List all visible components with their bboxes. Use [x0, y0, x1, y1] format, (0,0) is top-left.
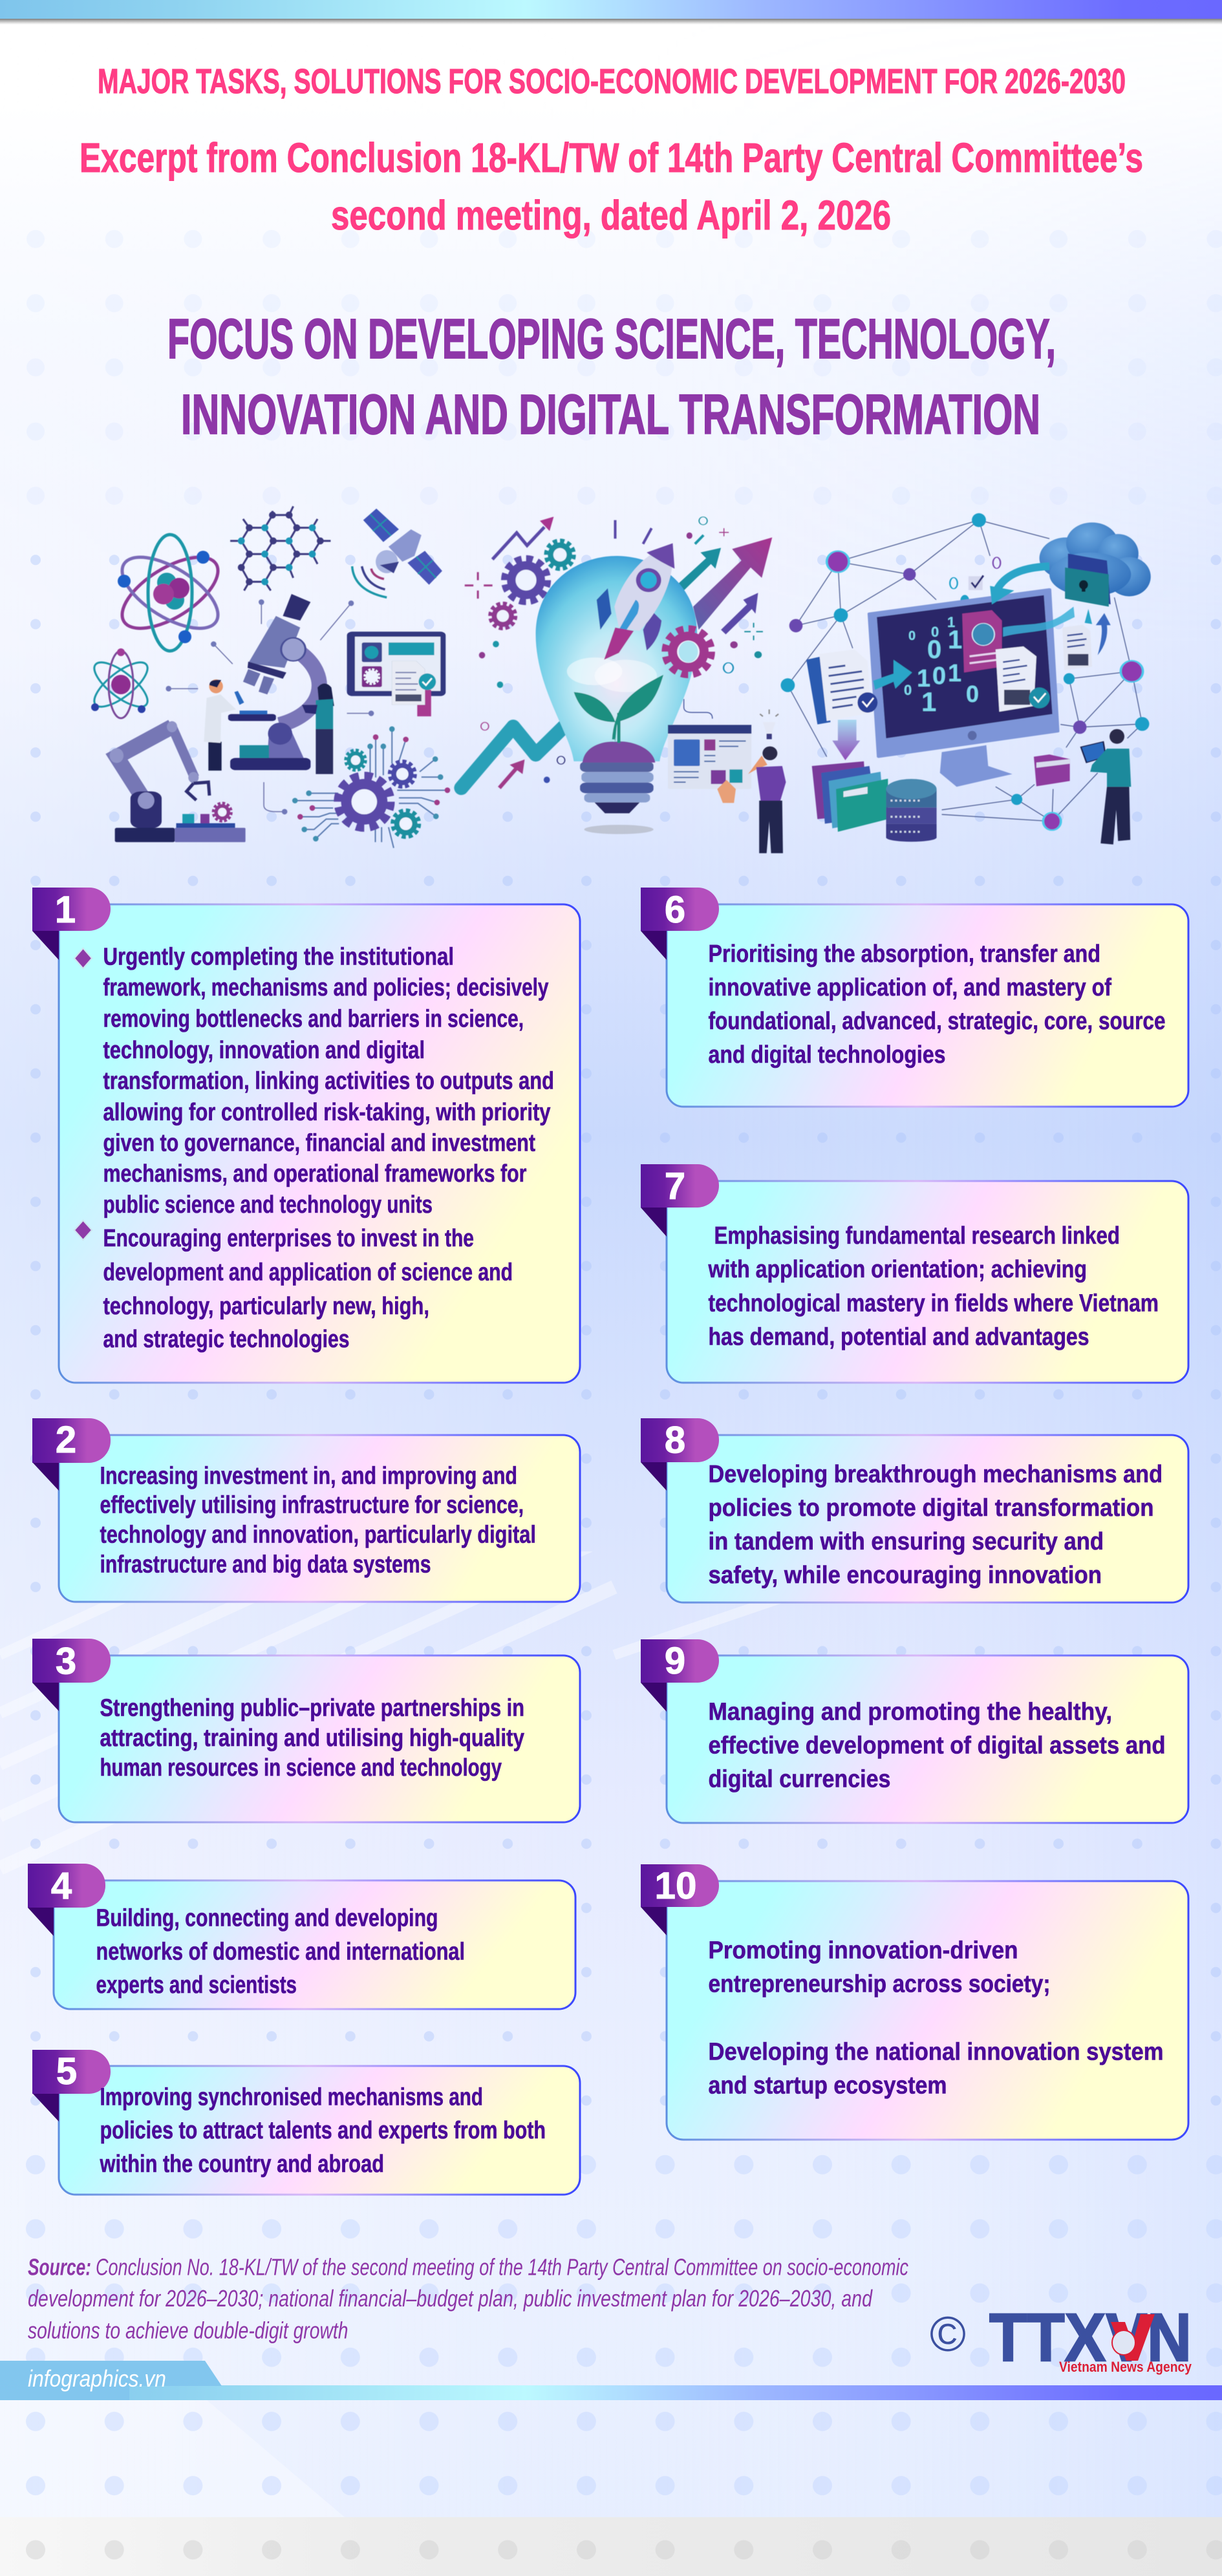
panel: task 1: Urgently completing the institutional: [103, 944, 454, 971]
icon: tablet with certificate: [347, 632, 445, 716]
diagram: network nodes: [780, 513, 1149, 830]
monitor binary text: 0: [904, 682, 912, 698]
panel: task 5: within the country and abroad: [100, 2151, 384, 2178]
panel: task 1: Encouraging enterprises to invest in the: [103, 1225, 474, 1252]
panel: task 9: effective development of digital assets and: [709, 1732, 1165, 1760]
panel: task 10: entrepreneurship across society;: [709, 1970, 1050, 1997]
right cluster drawn in local coordinates: [668, 513, 1151, 853]
monitor binary text: [904, 614, 979, 717]
subtitle: second meeting, dated April 2, 2026: [331, 192, 891, 239]
logo: TTXVN Vietnam News Agency: ©: [930, 2307, 966, 2362]
panel: task 6: Prioritising the absorption, transfer and: [709, 941, 1100, 968]
panel: task 1: removing bottlenecks and barriers in science,: [103, 1006, 524, 1033]
main heading: [167, 308, 1056, 446]
panel: task 4: Building, connecting and developing: [96, 1904, 438, 1932]
icon: folder: [1034, 754, 1070, 786]
icon: growth arrows and gears: [461, 516, 772, 788]
icon: computer monitor: [870, 590, 1058, 787]
panel: task 6: 6: [665, 889, 685, 931]
panel: task 3: human resources in science and technology: [100, 1754, 502, 1782]
panel: task 1: [32, 888, 580, 1383]
panel: task 4: experts and scientists: [96, 1972, 297, 1999]
panel: task 1: allowing for controlled risk-taking, with priority: [103, 1099, 551, 1126]
monitor binary text: 1: [947, 614, 955, 630]
panel: task 2: technology and innovation, particularly digital: [100, 1522, 536, 1549]
logo: TTXVN Vietnam News Agency: TTXVN: [989, 2300, 1192, 2376]
icon: satellite: [352, 509, 442, 597]
panel: task 10: and startup ecosystem: [709, 2072, 947, 2100]
panel: task 1: development and application of science and: [103, 1259, 513, 1286]
subtitle: [80, 134, 1143, 239]
figure: analyst with tablet: [1081, 729, 1131, 844]
panel: task 1: mechanisms, and operational frameworks for: [103, 1160, 527, 1187]
panel: task 8: [641, 1418, 1188, 1602]
icon: document with arrow: [806, 650, 912, 760]
icon: robot arm: [110, 721, 246, 842]
panel: task 9: 9: [665, 1640, 685, 1682]
panel: task 3: Strengthening public–private partnerships in: [100, 1695, 524, 1722]
panel: task 1: technology, particularly new, high,: [103, 1293, 429, 1320]
icon: microscope: [228, 594, 319, 770]
panel: task 1: framework, mechanisms and policies; decisively: [103, 974, 548, 1001]
icon: lightbulb with rocket and plant: [536, 543, 711, 834]
panel: task 7: has demand, potential and advantages: [709, 1324, 1089, 1351]
panel: task 2: effectively utilising infrastructure for science,: [100, 1492, 524, 1519]
monitor binary text: 1: [948, 660, 961, 687]
monitor binary text: 0: [966, 681, 979, 707]
panel: task 1: transformation, linking activities to outputs and: [103, 1068, 554, 1095]
panel: task 2: 2: [56, 1419, 76, 1461]
panel: task 7: Emphasising fundamental research linked: [714, 1222, 1120, 1250]
diagram: interface panel with person: [668, 699, 786, 853]
monitor binary text: 1: [917, 665, 930, 692]
panel: task 6: and digital technologies: [709, 1041, 945, 1069]
monitor binary text: 1: [921, 687, 936, 717]
monitor binary text: 0: [908, 629, 916, 643]
panel: task 6: innovative application of, and mastery of: [709, 974, 1111, 1001]
panel: task 3: [32, 1639, 580, 1822]
panel: task 5: [32, 2050, 580, 2195]
panel: task 1: public science and technology units: [103, 1191, 433, 1219]
panel: task 4: 4: [51, 1865, 72, 1907]
icon: hexagonal molecule: [230, 506, 330, 591]
panel: task 5: policies to attract talents and experts from both: [100, 2117, 546, 2144]
source note: [28, 2253, 908, 2344]
panel: task 6: [641, 888, 1188, 1107]
monitor binary text: 0: [931, 624, 939, 640]
panel: task 8: 8: [665, 1420, 685, 1461]
connector pins: [166, 599, 374, 814]
panel: task 5: Improving synchronised mechanisms and: [100, 2084, 483, 2111]
panel: task 8: safety, while encouraging innovation: [709, 1562, 1102, 1589]
source note: development for 2026–2030; national financial–budget plan, public investment plan for 2026–2030, and: [28, 2285, 873, 2312]
panel: task 10: Promoting innovation-driven: [709, 1937, 1018, 1964]
panel: task 4: networks of domestic and international: [96, 1938, 465, 1965]
icon: cloud with locked folder: [990, 522, 1151, 607]
icon: small atom: [88, 648, 154, 718]
footer bar with site tab: [0, 2361, 1222, 2400]
panel: task 3: 3: [56, 1641, 76, 1682]
panel: task 8: policies to promote digital transformation: [709, 1495, 1153, 1522]
panel: task 10: 10: [654, 1865, 697, 1907]
figure: scientist: [204, 679, 244, 771]
panel: task 10: [641, 1864, 1188, 2140]
illustration: science and technology hero: [88, 506, 1151, 853]
panel: task 7: with application orientation; achieving: [708, 1256, 1087, 1283]
panel: task 1: 1: [55, 889, 76, 931]
panel: task 1: and strategic technologies: [103, 1326, 349, 1353]
monitor binary text: 0: [927, 635, 941, 664]
panel: task 8: in tandem with ensuring security and: [709, 1528, 1104, 1555]
panel: task 9: Managing and promoting the healthy,: [709, 1699, 1112, 1726]
logo: TTXVN Vietnam News Agency: Vietnam News Agency: [1059, 2359, 1192, 2375]
panel: task 2: infrastructure and big data systems: [100, 1551, 431, 1579]
icon: large atom: [111, 535, 229, 651]
figure: researcher with tablet: [302, 683, 334, 774]
panel: task 5: 5: [56, 2050, 77, 2092]
icon: data flow arrows and barcode document: [1003, 607, 1111, 670]
monitor binary text: 0: [932, 663, 946, 690]
source note: Source:: [28, 2253, 91, 2281]
left cluster drawn in local coordinates: [110, 506, 450, 848]
icon: file folders: [812, 761, 888, 832]
panel: task 2: [32, 1418, 580, 1602]
source note: solutions to achieve double-digit growth: [28, 2317, 348, 2344]
panel: task 1: given to governance, financial and investment: [103, 1130, 535, 1157]
panel: task 9: [641, 1639, 1188, 1823]
panel: task 7: 7: [665, 1165, 685, 1208]
panel: task 1: technology, innovation and digital: [103, 1037, 425, 1064]
panel: task 8: Developing breakthrough mechanisms and: [709, 1461, 1163, 1488]
panel: task 7: [641, 1164, 1188, 1383]
panel: task 10: Developing the national innovation system: [709, 2039, 1164, 2066]
footer bar with site tab: infographics.vn: [28, 2365, 166, 2392]
icon: database stack: [886, 779, 937, 842]
panel: task 9: digital currencies: [709, 1766, 891, 1793]
panel: task 4: [28, 1864, 575, 2009]
icon: circuit gears: [292, 727, 450, 848]
monitor binary text: 1: [948, 626, 962, 654]
panel: task 2: Increasing investment in, and improving and: [100, 1462, 517, 1489]
source note: Conclusion No. 18-KL/TW of the second meeting of the 14th Party Central Committee on socio-economic: [96, 2253, 908, 2281]
panel: task 3: attracting, training and utilising high-quality: [100, 1725, 524, 1752]
top gradient bar: [0, 0, 1222, 25]
